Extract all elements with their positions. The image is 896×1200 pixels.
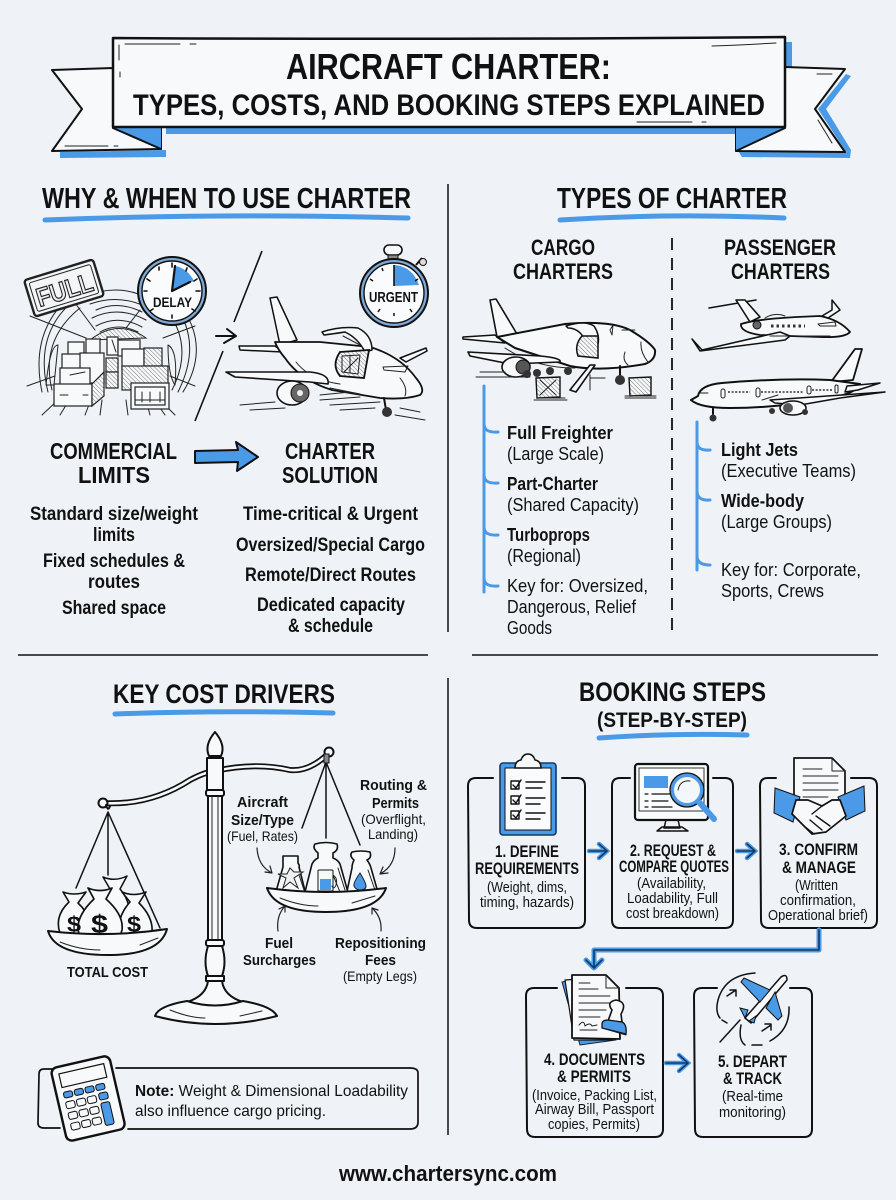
list: charter solution: Oversized/Special Cargo: [236, 535, 425, 556]
list: charter solution: Time-critical & Urgent: [243, 504, 419, 525]
footer url: www.chartersync.com: [338, 1161, 557, 1186]
list: passenger charter types: (Executive Teams): [721, 460, 856, 481]
list: cargo charter types: Dangerous, Relief: [507, 596, 637, 617]
illustration: freighter with open door: [226, 297, 427, 420]
illustration: business jet: [692, 300, 850, 351]
list: passenger charter types: Light Jets: [721, 439, 798, 460]
list: passenger charter types: [697, 422, 861, 601]
subheading: charter solution: CHARTER: [285, 438, 375, 464]
cost labels: Routing &: [360, 777, 427, 794]
step 4: documents and permits: (Invoice, Packing List,: [532, 1088, 657, 1104]
step 3: confirm and manage: Operational brief): [768, 907, 868, 924]
step 2: request and compare quotes: Loadability, Full: [627, 890, 718, 907]
panel: types of charter: [463, 183, 885, 638]
heading: booking steps: [579, 677, 766, 738]
cost labels: Landing): [368, 826, 418, 842]
step 2: request and compare quotes: COMPARE QUOTES: [619, 857, 729, 876]
list: commercial limits: limits: [93, 525, 135, 546]
panel: key cost drivers: [38, 679, 427, 1142]
list: charter solution: Dedicated capacity: [257, 595, 405, 616]
subheading: charter solution: SOLUTION: [282, 462, 378, 488]
panel: booking steps: [468, 677, 877, 1137]
cost labels: Fuel: [265, 935, 293, 952]
arrow: limits to solution: [195, 442, 258, 471]
subheading: commercial limits: LIMITS: [78, 462, 150, 488]
cost labels: (Fuel, Rates): [227, 828, 298, 844]
heading: types of charter: TYPES OF CHARTER: [557, 183, 787, 215]
step 1: define requirements: [468, 754, 585, 928]
list: cargo charter types: (Shared Capacity): [507, 494, 639, 515]
subheading: passenger charters: CHARTERS: [731, 259, 830, 284]
list: charter solution: [236, 504, 425, 637]
arrow: step 2 to 3: [737, 844, 755, 858]
arrow: step 3 down to 4: [586, 930, 819, 968]
icon: calculator: [50, 1055, 126, 1142]
step 4: documents and permits: [526, 975, 663, 1137]
step 3: confirm and manage: [760, 758, 877, 928]
note text: [135, 1083, 408, 1120]
label arrows: [257, 848, 395, 931]
step 4: documents and permits: & PERMITS: [557, 1067, 631, 1086]
heading: booking steps: BOOKING STEPS: [579, 677, 766, 707]
cost labels: Surcharges: [243, 952, 316, 969]
list: cargo charter types: Full Freighter: [507, 422, 613, 443]
note text: Note: Weight & Dimensional Loadability: [135, 1083, 408, 1100]
list: cargo charter types: Turboprops: [507, 524, 590, 545]
icon: urgent stopwatch: [360, 245, 428, 327]
subheading: commercial limits: COMMERCIAL: [50, 438, 177, 464]
cost labels: Permits: [372, 795, 419, 812]
step 4: documents and permits: 4. DOCUMENTS: [544, 1050, 645, 1069]
title banner: [52, 37, 851, 158]
step 3: confirm and manage: 3. CONFIRM: [779, 840, 858, 859]
subheading: passenger charters: [724, 235, 836, 284]
icon: urgent stopwatch: URGENT: [369, 289, 418, 306]
divider slash and arrow: [195, 251, 262, 421]
icon: delay clock: [138, 257, 206, 325]
list: cargo charter types: Part-Charter: [507, 473, 598, 494]
callout: note: [38, 1055, 418, 1142]
step 3: confirm and manage: (Written: [795, 877, 838, 894]
cost labels: [67, 777, 427, 984]
step 2: request and compare quotes: 2. REQUEST &: [630, 841, 716, 860]
list: charter solution: & schedule: [288, 616, 373, 637]
subheading: cargo charters: [513, 235, 613, 284]
list: charter solution: Remote/Direct Routes: [245, 565, 416, 586]
subheading: passenger charters: PASSENGER: [724, 235, 836, 260]
step 5: depart and track: monitoring): [719, 1105, 786, 1121]
step 1: define requirements: (Weight, dims,: [487, 879, 567, 896]
cost labels: Size/Type: [231, 812, 294, 829]
left pan: money bags: [48, 805, 167, 955]
list: cargo charter types: (Regional): [507, 545, 581, 566]
step 2: request and compare quotes: [612, 764, 733, 928]
list: passenger charter types: Key for: Corporate,: [721, 559, 861, 580]
step 1: define requirements: timing, hazards): [480, 894, 574, 911]
heading: key cost drivers: KEY COST DRIVERS: [113, 679, 335, 709]
list: commercial limits: [30, 504, 199, 619]
subheading: commercial limits: [50, 438, 177, 488]
heading: why and when: WHY & WHEN TO USE CHARTER: [42, 183, 411, 215]
icon: clipboard: [500, 754, 556, 835]
step 5: depart and track: (Real-time: [722, 1089, 783, 1105]
step 5: depart and track: 5. DEPART: [718, 1052, 787, 1071]
step 5: depart and track: & TRACK: [723, 1069, 783, 1088]
illustration: full cargo cabin: [27, 290, 196, 415]
left pan: money bags: $: [67, 912, 81, 937]
step 1: define requirements: REQUIREMENTS: [475, 859, 579, 878]
list: commercial limits: Fixed schedules &: [43, 551, 185, 572]
icon: document and handshake: [774, 758, 865, 834]
step 3: confirm and manage: confirmation,: [780, 892, 856, 909]
list: commercial limits: routes: [88, 572, 140, 593]
note text: also influence cargo pricing.: [135, 1103, 326, 1120]
subheading: cargo charters: CARGO: [531, 235, 595, 260]
illustration: balance scale: [98, 732, 334, 1024]
list: cargo charter types: [484, 386, 648, 638]
subheading: cargo charters: CHARTERS: [513, 259, 613, 284]
left pan: money bags: $: [127, 912, 141, 937]
arrow: step 1 to 2: [589, 844, 607, 858]
step 2: request and compare quotes: cost breakdown): [626, 905, 719, 922]
heading: types of charter: [557, 183, 787, 220]
cost labels: TOTAL COST: [67, 964, 148, 981]
title text: TYPES, COSTS, AND BOOKING STEPS EXPLAINED: [133, 89, 765, 122]
list: passenger charter types: Sports, Crews: [721, 580, 824, 601]
icon: documents and stamp: [562, 975, 626, 1045]
title text: AIRCRAFT CHARTER:: [286, 46, 611, 87]
arrow: step 4 to 5: [666, 1055, 688, 1071]
icon: delay clock: DELAY: [153, 295, 192, 310]
step 4: documents and permits: copies, Permits): [548, 1117, 640, 1133]
dashed divider: [671, 238, 673, 632]
cost labels: Aircraft: [237, 794, 288, 811]
right pan: weights: [267, 754, 386, 912]
subheading: charter solution: [282, 438, 378, 488]
illustration: wide-body airliner: [691, 349, 885, 422]
step 2: request and compare quotes: (Availability,: [637, 875, 706, 892]
illustration: cargo plane with pallets: [463, 299, 656, 400]
list: passenger charter types: (Large Groups): [721, 511, 832, 532]
list: commercial limits: Shared space: [62, 598, 166, 619]
stamp: full: FULL: [32, 267, 97, 313]
list: cargo charter types: Key for: Oversized,: [507, 575, 648, 596]
panel: why and when to use charter: [24, 183, 428, 637]
title text: [133, 46, 765, 122]
list: cargo charter types: Goods: [507, 617, 552, 638]
icon: monitor with magnifier: [635, 764, 714, 831]
cost labels: (Empty Legs): [343, 968, 417, 984]
cost labels: (Overflight,: [361, 811, 426, 827]
list: passenger charter types: Wide-body: [721, 490, 805, 511]
cost labels: Fees: [365, 952, 396, 969]
step 5: depart and track: [694, 973, 812, 1137]
cost labels: Repositioning: [335, 935, 426, 952]
step 4: documents and permits: Airway Bill, Passport: [535, 1102, 654, 1118]
icon: plane with tracking arcs: [717, 973, 789, 1045]
step 1: define requirements: 1. DEFINE: [495, 842, 559, 861]
list: commercial limits: Standard size/weight: [30, 504, 199, 525]
section dividers: [18, 184, 878, 1135]
heading: booking steps: (STEP-BY-STEP): [597, 709, 747, 732]
list: cargo charter types: (Large Scale): [507, 443, 604, 464]
step 3: confirm and manage: & MANAGE: [782, 858, 856, 877]
left pan: money bags: $: [91, 909, 109, 939]
